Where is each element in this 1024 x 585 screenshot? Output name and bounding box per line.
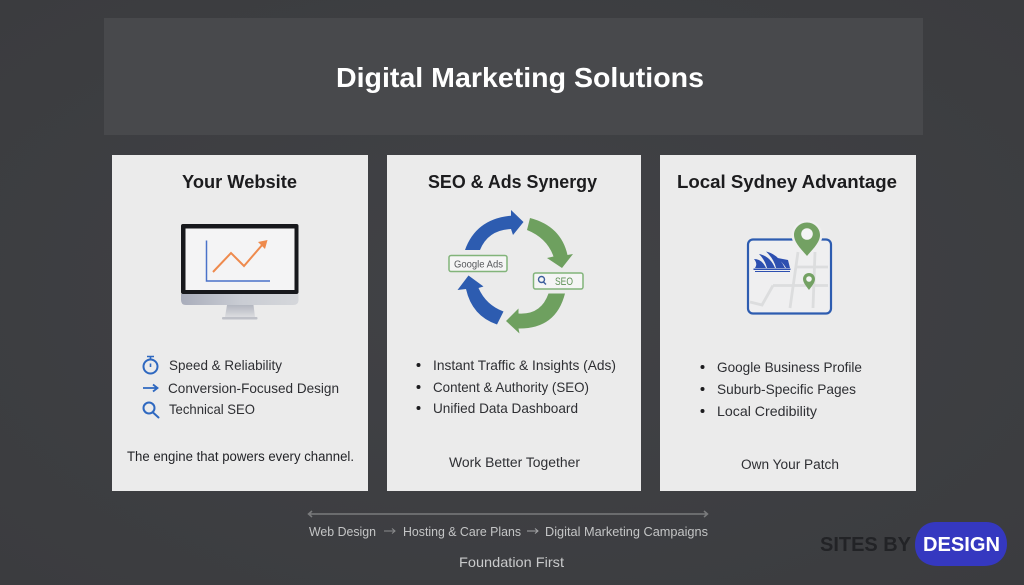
feature list: local: Suburb-Specific Pages — [717, 381, 856, 397]
arrow: green right — [527, 218, 573, 268]
arrow: green bottom — [506, 294, 565, 334]
text: foundation first: Foundation First — [459, 554, 564, 570]
pathway footer — [308, 511, 708, 570]
arrow: double-headed timeline — [308, 511, 708, 517]
feature list: local: Local Credibility — [717, 403, 817, 419]
arrow: blue top — [465, 210, 524, 250]
panel: local sydney advantage — [660, 155, 916, 491]
icon: small pin — [803, 273, 815, 290]
heading: seo and ads synergy: SEO & Ads Synergy — [428, 172, 597, 192]
logo: sites by design: DESIGN — [923, 533, 1000, 556]
feature list: synergy: Instant Traffic & Insights (Ads) — [433, 357, 616, 373]
text: service pathway: Web Design — [309, 525, 376, 539]
text: speed and reliability: Speed & Reliability — [169, 357, 282, 373]
tagline: local: Own Your Patch — [741, 457, 839, 472]
text: service pathway: Digital Marketing Campaigns — [545, 525, 708, 539]
panel: your website — [112, 155, 368, 491]
text: technical seo: Technical SEO — [169, 401, 255, 417]
panel: seo and ads synergy — [387, 155, 641, 491]
tagline: website: The engine that powers every channel. — [127, 449, 354, 464]
icon: sydney map with pins — [748, 220, 831, 314]
heading: your website: Your Website — [182, 172, 297, 192]
icon: desktop monitor with growth chart — [181, 224, 298, 320]
diagram: synergy cycle — [449, 210, 583, 334]
feature list: synergy: Unified Data Dashboard — [433, 400, 578, 416]
text: service pathway — [309, 525, 708, 539]
feature list: local — [700, 359, 862, 419]
header panel — [104, 18, 923, 135]
arrow: blue left — [458, 276, 504, 324]
heading: local sydney advantage: Local Sydney Advantage — [677, 172, 897, 192]
title: Digital Marketing Solutions — [336, 62, 704, 93]
tagline: synergy: Work Better Together — [449, 455, 581, 470]
logo: sites by design — [820, 522, 1007, 566]
text: conversion-focused design: Conversion-Focused Design — [168, 380, 339, 396]
feature list: website — [143, 356, 339, 418]
icon: large pin — [792, 220, 822, 259]
icon: magnifier — [144, 402, 158, 418]
feature list: synergy: Content & Authority (SEO) — [433, 379, 589, 395]
text: service pathway: Hosting & Care Plans — [403, 525, 521, 539]
icon: stopwatch — [144, 356, 158, 374]
feature list: local: Google Business Profile — [717, 359, 862, 375]
icon: opera house — [754, 252, 790, 272]
badge: google ads: Google Ads — [454, 258, 503, 270]
logo: sites by design: SITES BY — [820, 534, 912, 556]
badge: seo: SEO — [555, 276, 573, 288]
icon: arrow — [143, 384, 158, 392]
feature list: synergy — [416, 357, 616, 416]
